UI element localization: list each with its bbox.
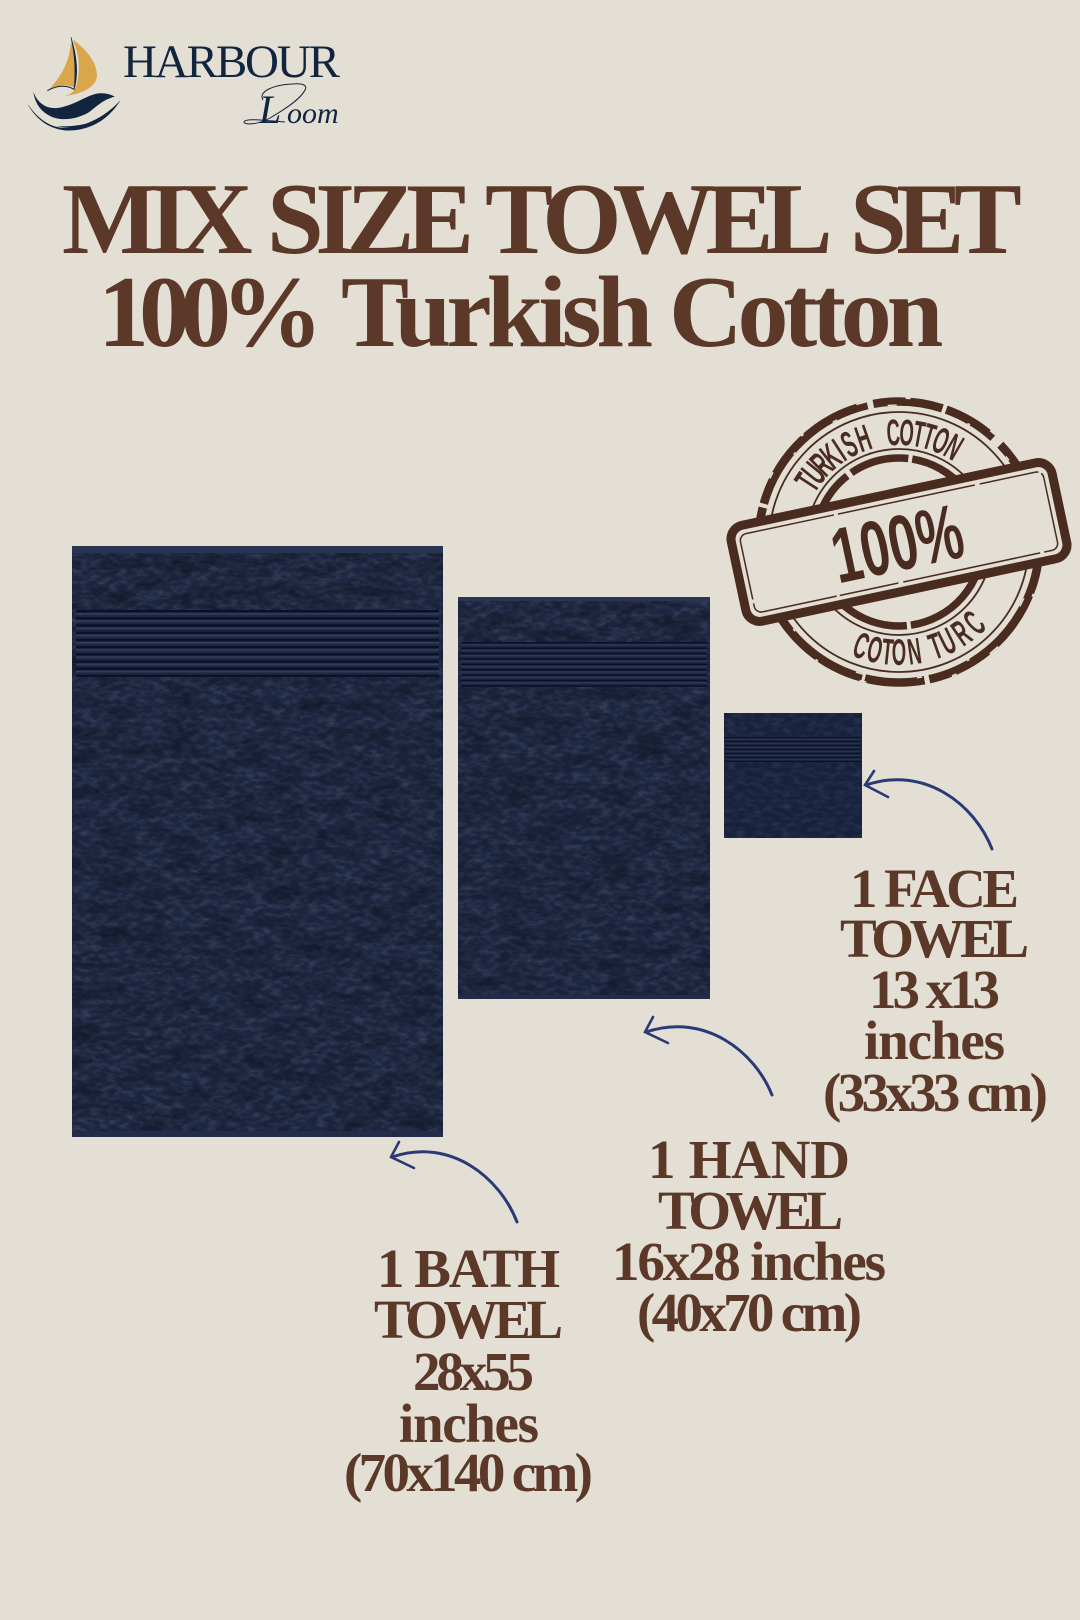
label: face towel: 1 FACE [850,858,1019,919]
label: bath towel: (70x140 cm) [344,1442,593,1503]
stamp text: Turkish Cotton: T [918,417,940,459]
stamp text: Coton Turc: T [880,632,895,674]
face towel [724,713,862,838]
logo: Harbour Loom [27,36,341,132]
stamp text: Turkish Cotton: U [795,456,835,492]
brand script: L [258,87,281,132]
stamp text: Turkish Cotton: H [851,418,877,461]
title line 1: MIX [62,163,252,276]
label: hand towel: 1 HAND [648,1129,850,1190]
stamp rings [758,402,1040,682]
title line 1: SIZE [267,163,469,276]
label: bath towel: 28x55 [413,1341,534,1402]
stamp text: Turkish Cotton: O [898,413,915,455]
stamp text: Turkish Cotton: N [937,427,969,469]
label: face towel: (33x33 cm) [823,1062,1048,1123]
title [62,163,1021,369]
stamp text: Coton Turc: R [945,614,979,654]
stamp distress marks [755,398,1043,686]
arrow: hand towel [645,1017,772,1095]
stamp text: Turkish Cotton: I [827,433,853,469]
title line 1: SET [850,163,1021,276]
stamp text: Coton Turc: N [905,632,924,674]
arrow: bath towel [391,1142,517,1222]
stamp text: Turkish Cotton: C [886,413,901,454]
title line 2: Cotton [669,256,943,369]
stamp text: Coton Turc [848,604,994,674]
hand towel [458,597,710,999]
arrow: face towel [865,771,992,849]
stamp text: Turkish Cotton: T [788,467,828,499]
stamp text: Coton Turc: O [863,630,886,672]
stamp text: Turkish Cotton: O [926,420,955,463]
stamp text: Turkish Cotton: K [814,437,849,477]
stamp text: Coton Turc: U [933,621,963,663]
label: face towel [823,858,1048,1123]
title line 2: 100% [98,256,314,369]
title line 1: TOWEL [485,163,829,276]
stamp text: Coton Turc: O [892,633,906,674]
brand name: HARBOUR [123,36,341,88]
title line 2: Turkish [341,256,652,369]
label: face towel: TOWEL [840,908,1029,969]
stamp text: Coton Turc: C [848,626,874,668]
badge: 100% Turkish cotton stamp [728,398,1070,686]
label: bath towel: 1 BATH [377,1238,560,1299]
stamp text: Coton Turc: T [924,626,948,668]
stamp text: Turkish Cotton [788,413,969,499]
label: hand towel [612,1129,886,1343]
label: hand towel: (40x70 cm) [637,1282,862,1343]
brand script swash [244,84,306,124]
bath towel [72,546,443,1137]
label: face towel: inches [864,1010,1005,1071]
label: bath towel: inches [399,1393,539,1454]
label: face towel: 13 x13 [869,959,1000,1020]
stamp text: Turkish Cotton: R [803,446,841,484]
stamp banner [728,460,1070,624]
stamp text: Turkish Cotton: S [835,425,864,466]
stamp text: Turkish Cotton: T [910,415,928,456]
label: hand towel: TOWEL [658,1180,843,1241]
brand script: oom [287,97,339,130]
stamp text: Coton Turc: C [956,604,994,643]
label: bath towel: TOWEL [374,1289,563,1350]
icon: sailboat [27,37,121,131]
label: hand towel: 16x28 inches [612,1231,886,1292]
label: bath towel [344,1238,593,1503]
stamp text: 100%: 100% [824,487,971,600]
